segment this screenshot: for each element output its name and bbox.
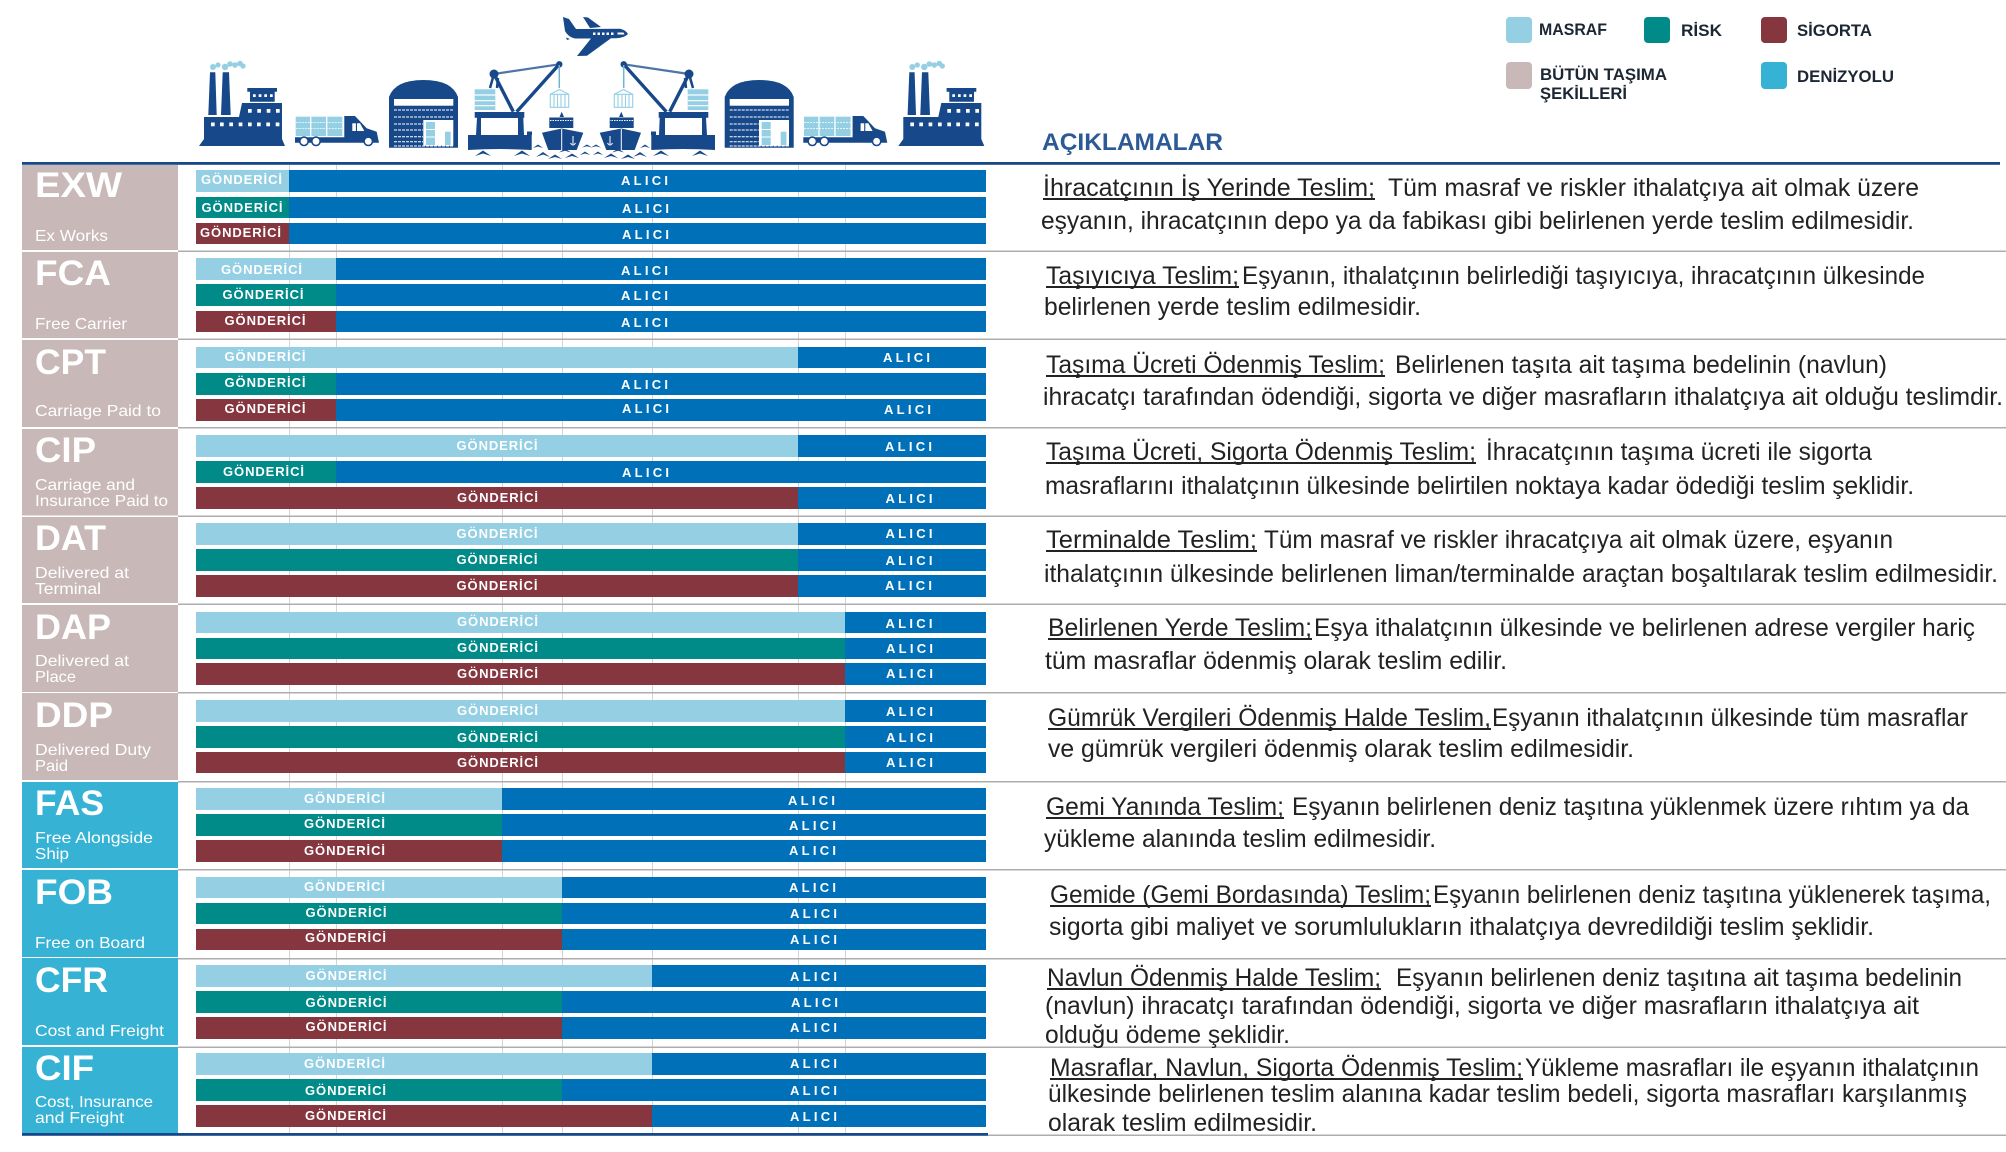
bars: CIP: ALICI	[885, 439, 932, 454]
bars: CIP: GÖNDERİCİ	[223, 464, 304, 479]
bars: FAS: ALICI	[788, 793, 835, 808]
bars: CIF: ALICI	[790, 1109, 837, 1124]
bars: DAP: ALICI	[886, 616, 932, 631]
description: FAS: Gemi Yanında Teslim;	[1046, 793, 1284, 821]
description: CFR: Navlun Ödenmiş Halde Teslim;	[1047, 964, 1381, 992]
bars: DDP	[196, 700, 986, 773]
label: FOB	[22, 870, 178, 957]
label: DDP: DDP	[35, 696, 113, 735]
bars: CIF: GÖNDERİCİ	[304, 1056, 385, 1071]
bars: DAP	[196, 612, 986, 685]
bars: CIF	[196, 1053, 986, 1127]
label: CIP: Insurance Paid to	[35, 493, 168, 510]
row: FCA	[22, 252, 1925, 338]
label: DDP: Paid	[35, 758, 68, 775]
description: FAS: yükleme alanında teslim edilmesidir.	[1044, 825, 1436, 853]
description: CPT: Taşıma Ücreti Ödenmiş Teslim;	[1046, 351, 1385, 379]
legend item: masraf: MASRAF	[1539, 20, 1607, 39]
row: CIP	[22, 429, 1914, 516]
description: FCA: belirlenen yerde teslim edilmesidir.	[1044, 293, 1421, 321]
bars: DAT: ALICI	[886, 553, 932, 568]
legend item: risk	[1644, 17, 1723, 43]
legend item: all transport modes	[1506, 62, 1667, 103]
description: CFR: Eşyanın belirlenen deniz taşıtına ait taşıma bedelinin	[1396, 964, 1962, 992]
bars: CFR: GÖNDERİCİ	[306, 968, 386, 983]
bars: CIP: GÖNDERİCİ	[457, 490, 538, 505]
description: FOB: Eşyanın belirlenen deniz taşıtına yüklenerek taşıma,	[1433, 881, 1991, 909]
description: EXW	[1041, 173, 1919, 235]
description: CPT: Belirlenen taşıta ait taşıma bedelinin (navlun)	[1395, 351, 1887, 379]
row: DDP	[22, 693, 1968, 780]
icon: seller truck	[295, 116, 379, 146]
bars: FOB: GÖNDERİCİ	[304, 879, 385, 894]
bars: EXW: ALICI	[622, 227, 669, 242]
description: CFR: (navlun) ihracatçı tarafından ödendiği, sigorta ve diğer masrafların ithalatçıya ait	[1045, 992, 1919, 1020]
description: FCA	[1044, 262, 1925, 321]
icon: buyer warehouse	[725, 80, 794, 148]
row: CFR	[22, 958, 1962, 1049]
row: FAS	[22, 782, 1969, 868]
bars: FOB: ALICI	[789, 880, 836, 895]
icon: origin port crane and ship	[468, 61, 592, 159]
bars: FAS: GÖNDERİCİ	[304, 791, 385, 806]
label: FOB: Free on Board	[35, 935, 145, 952]
label: CIF	[22, 1047, 178, 1133]
label: CFR: Cost and Freight	[35, 1023, 165, 1040]
description: FOB: Gemide (Gemi Bordasında) Teslim;	[1050, 881, 1431, 909]
bars: DDP: GÖNDERİCİ	[457, 730, 538, 745]
legend item: sea transport	[1761, 62, 1894, 89]
description: FAS	[1044, 793, 1969, 853]
bars: DAP: ALICI	[886, 641, 933, 656]
bars: FOB: GÖNDERİCİ	[305, 930, 386, 945]
legend item: sea transport: DENİZYOLU	[1797, 67, 1894, 86]
description: DAT	[1044, 526, 1998, 588]
bars: FOB: ALICI	[790, 932, 837, 947]
bars: DDP: GÖNDERİCİ	[457, 755, 538, 770]
bars: DAT: GÖNDERİCİ	[456, 552, 538, 567]
bars: FCA: ALICI	[621, 263, 668, 278]
row: FOB	[22, 870, 1991, 957]
legend item: masraf	[1506, 17, 1607, 43]
header illustration: transport chain	[199, 17, 984, 159]
description: DAT: Tüm masraf ve riskler ihracatçıya ait olmak üzere, eşyanın	[1264, 526, 1893, 554]
bars: CIP: ALICI	[622, 465, 669, 480]
bars: FOB: GÖNDERİCİ	[306, 905, 386, 920]
bars: EXW: GÖNDERİCİ	[202, 200, 282, 215]
label: FAS: FAS	[35, 784, 104, 823]
row: CIF	[22, 1047, 1979, 1137]
bars: DDP: ALICI	[886, 755, 933, 770]
description: DAP: tüm masraflar ödenmiş olarak teslim edilir.	[1045, 647, 1507, 675]
description: CIF: Masraflar, Navlun, Sigorta Ödenmiş Teslim;	[1050, 1054, 1523, 1082]
row: CPT	[22, 340, 2003, 427]
bars: DAP: GÖNDERİCİ	[457, 666, 538, 681]
description: CIP: İhracatçının taşıma ücreti ile sigorta	[1486, 437, 1872, 466]
label: FAS	[22, 782, 178, 868]
description: CPT	[1043, 351, 2003, 411]
label: CIF: Cost, Insurance	[35, 1094, 153, 1111]
bars: DAT: ALICI	[886, 526, 932, 541]
description: FCA: Eşyanın, ithalatçının belirlediği taşıyıcıya, ihracatçının ülkesinde	[1242, 262, 1925, 290]
bars: DAT	[196, 523, 986, 597]
label: FCA	[22, 252, 178, 338]
label: FAS: Free Alongside	[35, 830, 153, 847]
label: DAP	[22, 605, 178, 692]
label: DDP: Delivered Duty	[35, 742, 151, 759]
label: DAT: Terminal	[35, 581, 101, 598]
legend	[1506, 17, 1894, 103]
bars: FOB	[196, 877, 986, 950]
bars: FOB: ALICI	[790, 906, 837, 921]
description: DAP	[1045, 614, 1975, 675]
label: FOB: FOB	[35, 873, 113, 912]
bars: CFR: ALICI	[790, 1020, 837, 1035]
bars: FAS: GÖNDERİCİ	[304, 843, 385, 858]
bars: FCA: GÖNDERİCİ	[221, 262, 302, 277]
label: EXW: Ex Works	[35, 228, 108, 245]
label: CIP: Carriage and	[35, 477, 135, 494]
bars: EXW: GÖNDERİCİ	[201, 172, 282, 187]
label: CIF: and Freight	[35, 1110, 125, 1127]
description: DDP	[1048, 704, 1968, 763]
label: CPT: Carriage Paid to	[35, 403, 161, 420]
bars: CFR: GÖNDERİCİ	[306, 995, 386, 1010]
legend item: risk: RİSK	[1681, 21, 1723, 40]
description: CIP: Taşıma Ücreti, Sigorta Ödenmiş Teslim;	[1046, 438, 1476, 466]
label: FAS: Ship	[35, 846, 69, 863]
description: FCA: Taşıyıcıya Teslim;	[1046, 262, 1239, 290]
row: EXW	[22, 165, 1919, 250]
bars: FCA: GÖNDERİCİ	[224, 313, 306, 328]
label: CFR: CFR	[35, 961, 108, 1000]
bars: CFR: GÖNDERİCİ	[306, 1019, 386, 1034]
label: DAP: Place	[35, 669, 76, 686]
separators	[178, 250, 2006, 1136]
label: CFR	[22, 958, 178, 1045]
description: CFR	[1045, 964, 1962, 1049]
bars: EXW: ALICI	[621, 173, 668, 188]
bars: DDP: ALICI	[886, 730, 933, 745]
description: DAT: Terminalde Teslim;	[1046, 526, 1257, 554]
icon: buyer factory	[898, 61, 984, 146]
bars: CPT: ALICI	[884, 402, 931, 417]
bars: CIP: ALICI	[886, 491, 932, 506]
label: CIF: CIF	[35, 1049, 94, 1088]
row: DAP	[22, 605, 1975, 692]
description: CIF: Yükleme masrafları ile eşyanın ithalatçının	[1525, 1054, 1979, 1082]
bars: FAS: ALICI	[789, 818, 836, 833]
label: CIP	[22, 429, 178, 516]
description: CPT: ihracatçı tarafından ödendiği, sigorta ve diğer masrafların ithalatçıya ait olduğu teslimdir.	[1043, 383, 2003, 411]
label: DAT: DAT	[35, 519, 106, 558]
description: CIP	[1045, 437, 1914, 500]
bars: FAS: GÖNDERİCİ	[304, 816, 385, 831]
label: DDP	[22, 693, 178, 780]
bars: CIP: GÖNDERİCİ	[456, 438, 538, 453]
label: FCA: FCA	[35, 254, 111, 293]
bars: FAS: ALICI	[789, 843, 836, 858]
bars: EXW: GÖNDERİCİ	[200, 225, 281, 240]
icon: airplane	[563, 17, 628, 56]
bars: CFR: ALICI	[791, 995, 838, 1010]
vertical grid lines	[290, 165, 846, 1133]
description: DAT: ithalatçının ülkesinde belirlenen liman/terminalde araçtan boşaltılarak teslim edilmesidir.	[1044, 560, 1998, 588]
bars: DAP: ALICI	[886, 666, 933, 681]
bars: DAT: GÖNDERİCİ	[456, 526, 538, 541]
icon: destination port crane and ship	[591, 61, 715, 159]
bars: DAT: ALICI	[885, 578, 932, 593]
bars: CPT: GÖNDERİCİ	[224, 375, 306, 390]
bars: DAT: GÖNDERİCİ	[456, 578, 538, 593]
legend item: all transport modes: BÜTÜN TAŞIMA	[1540, 65, 1667, 84]
label: CIP: CIP	[35, 431, 96, 470]
label: CPT	[22, 340, 178, 427]
label: EXW: EXW	[35, 166, 122, 205]
description: CFR: olduğu ödeme şeklidir.	[1045, 1021, 1290, 1049]
row: DAT	[22, 517, 1998, 603]
bars: FAS	[196, 788, 986, 862]
bars: CIF: GÖNDERİCİ	[305, 1108, 386, 1123]
description: DAP: Eşya ithalatçının ülkesinde ve belirlenen adrese vergiler hariç	[1314, 614, 1975, 642]
description: DDP: ve gümrük vergileri ödenmiş olarak teslim edilmesidir.	[1048, 735, 1634, 763]
bars: CPT: GÖNDERİCİ	[224, 401, 306, 416]
label: CPT: CPT	[35, 343, 106, 382]
bars: FCA: GÖNDERİCİ	[222, 287, 304, 302]
bars: CFR: ALICI	[790, 969, 837, 984]
description: CIF: olarak teslim edilmesidir.	[1048, 1109, 1317, 1137]
label: FCA: Free Carrier	[35, 316, 128, 333]
bars: EXW: ALICI	[622, 201, 669, 216]
description: CIF: ülkesinde belirlenen teslim alanına kadar teslim bedeli, sigorta masrafları karşılanmış	[1048, 1080, 1967, 1108]
description: DDP: Eşyanın ithalatçının ülkesinde tüm masraflar	[1492, 704, 1968, 732]
bars: DAP: GÖNDERİCİ	[457, 640, 538, 655]
description: DAP: Belirlenen Yerde Teslim;	[1048, 614, 1312, 642]
description: FOB	[1049, 881, 1991, 941]
bars: FCA	[196, 258, 986, 332]
description: EXW: İhracatçının İş Yerinde Teslim;	[1043, 173, 1375, 202]
description: CIP: masraflarını ithalatçının ülkesinde belirtilen noktaya kadar ödediği teslim şeklidir.	[1045, 472, 1914, 500]
description: FAS: Eşyanın belirlenen deniz taşıtına yüklenmek üzere rıhtım ya da	[1292, 793, 1969, 821]
label: DAT	[22, 517, 178, 603]
bars: FCA: ALICI	[621, 288, 668, 303]
description: DDP: Gümrük Vergileri Ödenmiş Halde Teslim,	[1048, 704, 1491, 732]
description: CIF	[1048, 1054, 1979, 1137]
legend item: all transport modes: ŞEKİLLERİ	[1540, 84, 1627, 103]
bars: CPT: ALICI	[883, 350, 930, 365]
bars: CPT	[196, 347, 986, 421]
legend item: sigorta: SİGORTA	[1797, 21, 1872, 40]
description: EXW: Tüm masraf ve riskler ithalatçıya ait olmak üzere	[1388, 174, 1919, 202]
legend item: sigorta	[1761, 17, 1872, 43]
bars: CIF: ALICI	[790, 1056, 837, 1071]
label: EXW	[22, 165, 178, 250]
bars: CPT: GÖNDERİCİ	[224, 349, 306, 364]
bars: CPT: ALICI	[621, 377, 668, 392]
bars: CFR	[196, 965, 986, 1039]
label: DAP: DAP	[35, 608, 111, 647]
icon: seller factory	[199, 61, 285, 146]
bars: CIF: ALICI	[790, 1083, 837, 1098]
bars: CIF: GÖNDERİCİ	[305, 1083, 386, 1098]
description: FOB: sigorta gibi maliyet ve sorumlulukların ithalatçıya devredildiği teslim şeklidir.	[1049, 913, 1874, 941]
bars: DDP: ALICI	[886, 704, 933, 719]
bars: DDP: GÖNDERİCİ	[457, 703, 538, 718]
description: EXW: eşyanın, ihracatçının depo ya da fabikası gibi belirlenen yerde teslim edilmesidir.	[1041, 207, 1914, 235]
heading: açıklamalar: AÇIKLAMALAR	[1042, 129, 1223, 156]
icon: seller warehouse	[389, 80, 458, 148]
label: DAP: Delivered at	[35, 653, 130, 670]
bars: CIP	[196, 435, 986, 509]
bars: CPT: ALICI	[622, 401, 669, 416]
bars: DAP: GÖNDERİCİ	[457, 614, 538, 629]
bars: FCA: ALICI	[621, 315, 668, 330]
icon: buyer truck	[803, 116, 887, 146]
label: DAT: Delivered at	[35, 565, 130, 582]
bars: EXW	[196, 170, 986, 244]
